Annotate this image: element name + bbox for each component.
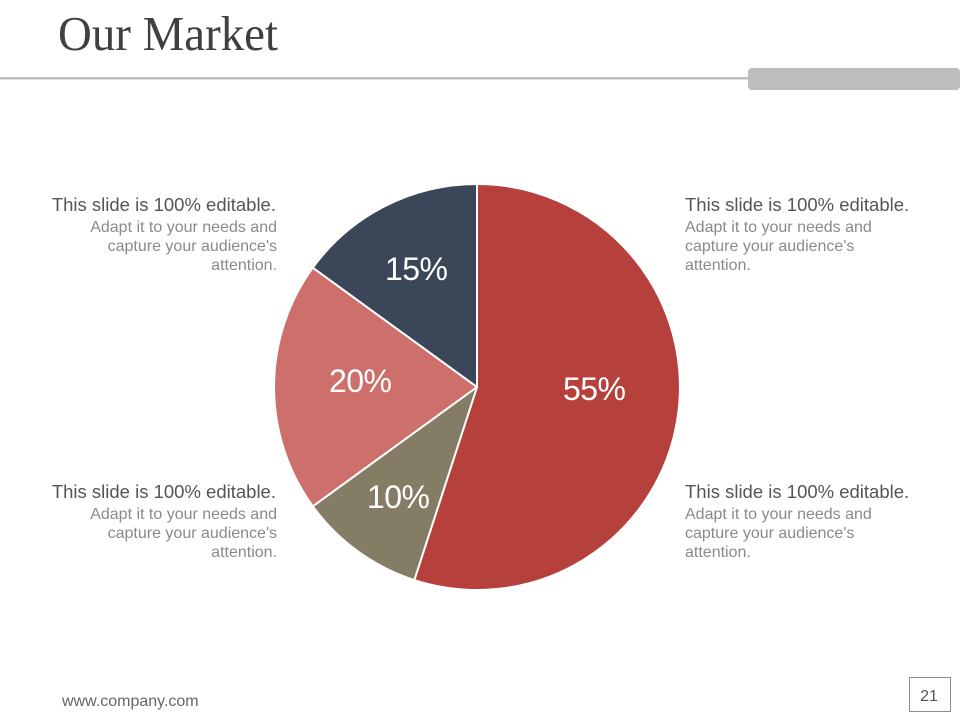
text block: top right: Adapt it to your needs and: [685, 219, 872, 236]
text block: bottom right: capture your audience's: [685, 525, 854, 542]
page number box: [910, 678, 950, 712]
text block: bottom left: capture your audience's: [108, 525, 277, 542]
slice: 20%: [274, 268, 477, 506]
label: 20%: 20%: [329, 363, 392, 399]
slice: 15%: [313, 184, 477, 387]
text block: top left: Adapt it to your needs and: [90, 219, 277, 236]
header rule with tab: [0, 68, 960, 90]
text block: bottom right: [685, 481, 909, 561]
text block: top left: capture your audience's: [108, 238, 277, 255]
text block: top left: attention.: [211, 257, 277, 274]
text block: bottom right: attention.: [685, 544, 751, 561]
text block: bottom left: attention.: [211, 544, 277, 561]
label: 10%: 10%: [367, 479, 430, 515]
slice: 55%: [414, 184, 680, 590]
pie chart: [274, 184, 680, 590]
text block: bottom right: Adapt it to your needs and: [685, 506, 872, 523]
text block: top right: This slide is 100% editable.: [685, 194, 909, 215]
text block: top right: capture your audience's: [685, 238, 854, 255]
title: Our Market: [58, 6, 278, 61]
text block: bottom right: This slide is 100% editable.: [685, 481, 909, 502]
text block: bottom left: [52, 481, 277, 561]
slice: 10%: [313, 387, 477, 580]
label: 55%: 55%: [563, 371, 626, 407]
text block: top right: attention.: [685, 257, 751, 274]
text block: top left: [52, 194, 277, 274]
text block: top right: [685, 194, 909, 274]
text block: bottom left: Adapt it to your needs and: [90, 506, 277, 523]
label: 15%: 15%: [385, 251, 448, 287]
page number box: 21: [920, 688, 938, 705]
footer website: www.company.com: [61, 693, 199, 710]
text block: top left: This slide is 100% editable.: [52, 194, 276, 215]
text block: bottom left: This slide is 100% editable.: [52, 481, 276, 502]
